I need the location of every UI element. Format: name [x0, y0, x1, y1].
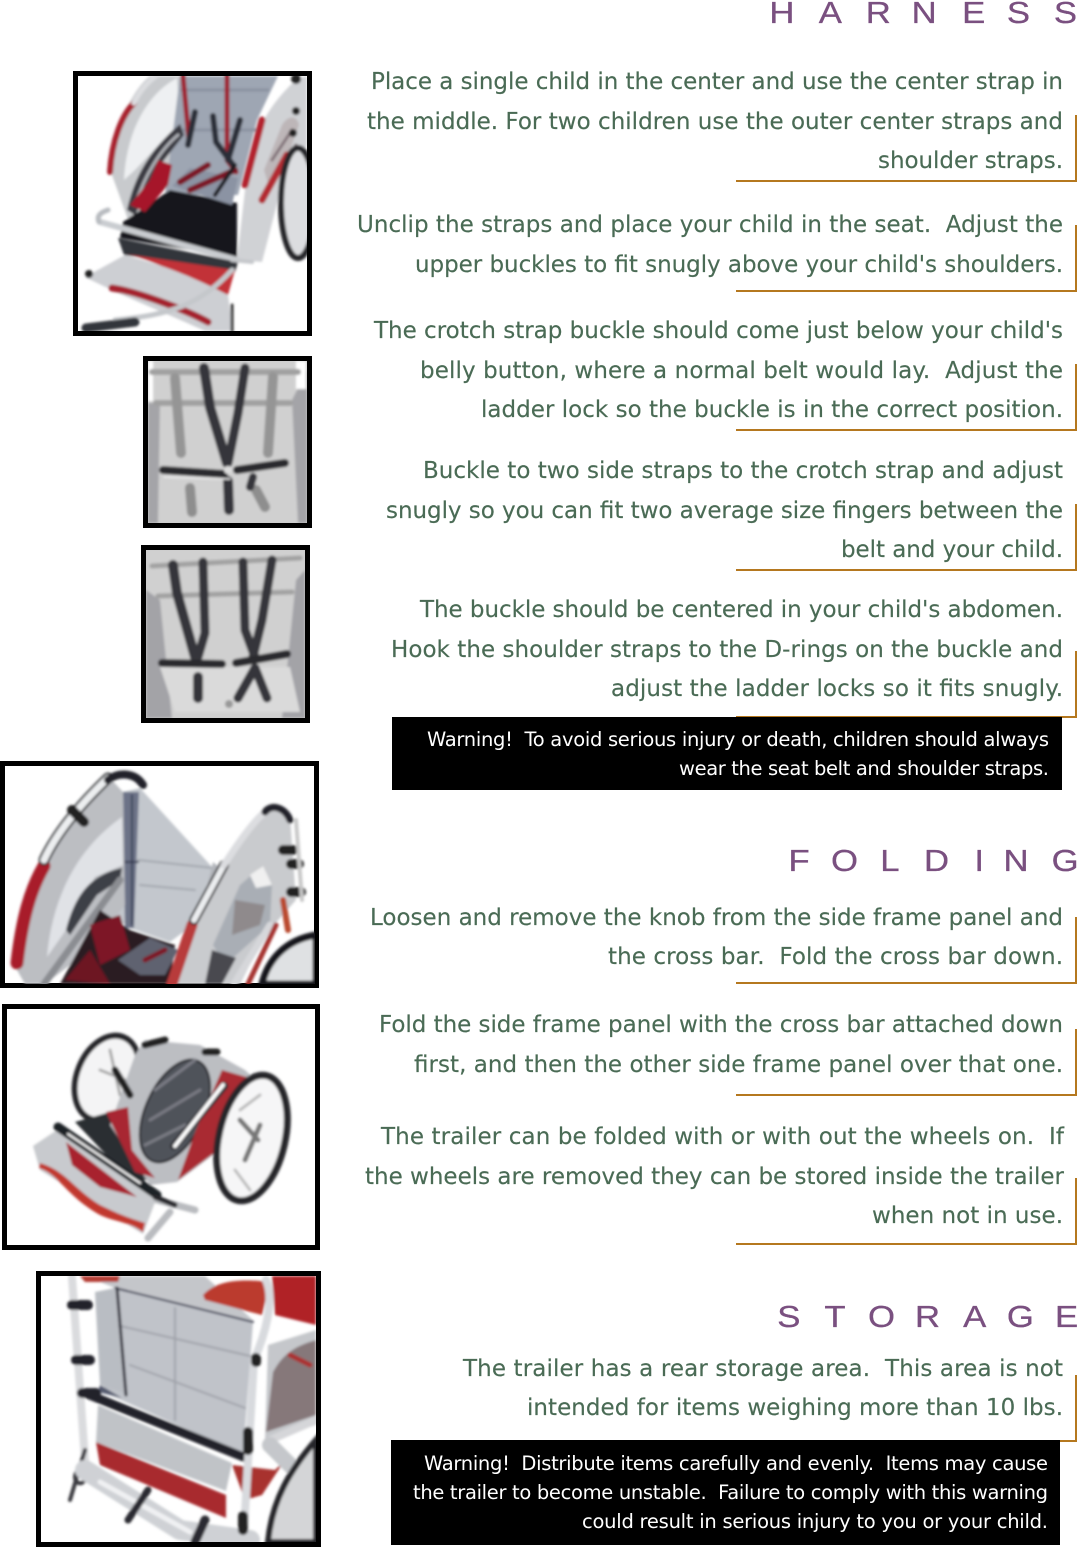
text block: crotch strap: belly button, where a normal belt would lay. Adjust the [420, 358, 1063, 384]
text block: center strap: the middle. For two children use the outer center straps and [367, 109, 1063, 135]
text block: rear storage [462, 1356, 1076, 1441]
text block: rear storage: The trailer has a rear storage area. This area is not [462, 1356, 1063, 1382]
text block: crotch strap: The crotch strap buckle should come just below your child's [373, 318, 1063, 344]
warning: seat belt [392, 717, 1062, 790]
text block: shoulder straps: adjust the ladder locks so it fits snugly. [611, 676, 1063, 702]
text block: rear storage: intended for items weighing more than 10 lbs. [527, 1395, 1063, 1421]
text block: crotch strap: ladder lock so the buckle is in the correct position. [481, 397, 1063, 423]
warning: seat belt: wear the seat belt and shoulder straps. [679, 757, 1049, 780]
text block: side straps: Buckle to two side straps to the crotch strap and adjust [423, 458, 1063, 484]
text block: remove knob [370, 905, 1076, 983]
text block: side straps: snugly so you can fit two average size fingers between the [386, 498, 1063, 524]
text block: wheels: The trailer can be folded with or with out the wheels on. If [380, 1124, 1065, 1150]
heading: folding: FOLDING [788, 843, 1079, 878]
text block: fold side panel: Fold the side frame panel with the cross bar attached down [379, 1012, 1063, 1038]
text block: wheels: the wheels are removed they can be stored inside the trailer [365, 1164, 1065, 1190]
photo: rear storage area [38, 1274, 318, 1544]
heading: storage: STORAGE [777, 1299, 1078, 1334]
text block: unclip straps: Unclip the straps and place your child in the seat. Adjust the [357, 212, 1063, 238]
text block: unclip straps: upper buckles to fit snugly above your child's shoulders. [415, 252, 1063, 278]
text block: wheels: when not in use. [872, 1203, 1063, 1229]
warning: distribute items: Warning! Distribute items carefully and evenly. Items may cause [424, 1452, 1048, 1475]
warning: seat belt: Warning! To avoid serious injury or death, children should always [427, 728, 1049, 751]
text block: fold side panel [379, 1012, 1076, 1095]
photo: trailer with frame raised [2, 764, 316, 986]
text block: unclip straps [357, 212, 1076, 291]
warning: distribute items: the trailer to become unstable. Failure to comply with this warning [413, 1481, 1048, 1504]
text block: shoulder straps: Hook the shoulder straps to the D-rings on the buckle and [391, 637, 1063, 663]
warning: distribute items [391, 1440, 1060, 1545]
text block: side straps: belt and your child. [841, 537, 1063, 563]
text block: fold side panel: first, and then the other side frame panel over that one. [414, 1052, 1063, 1078]
text block: wheels [365, 1124, 1076, 1244]
photo: trailer seat interior [76, 74, 315, 334]
photo: two children strap layout [144, 548, 308, 720]
text block: center strap [367, 69, 1076, 181]
text block: shoulder straps: The buckle should be centered in your child's abdomen. [419, 597, 1063, 623]
text block: remove knob: Loosen and remove the knob from the side frame panel and [370, 905, 1063, 931]
text block: shoulder straps [391, 597, 1076, 717]
warning: distribute items: could result in serious injury to you or your child. [582, 1510, 1048, 1533]
text block: crotch strap [373, 318, 1076, 430]
text block: center strap: Place a single child in the center and use the center strap in [371, 69, 1063, 95]
text block: center strap: shoulder straps. [878, 148, 1063, 174]
text block: side straps [386, 458, 1076, 570]
photo: trailer partly folded [4, 1006, 318, 1248]
photo: single child strap layout [146, 358, 310, 526]
text block: remove knob: the cross bar. Fold the cross bar down. [608, 944, 1063, 970]
